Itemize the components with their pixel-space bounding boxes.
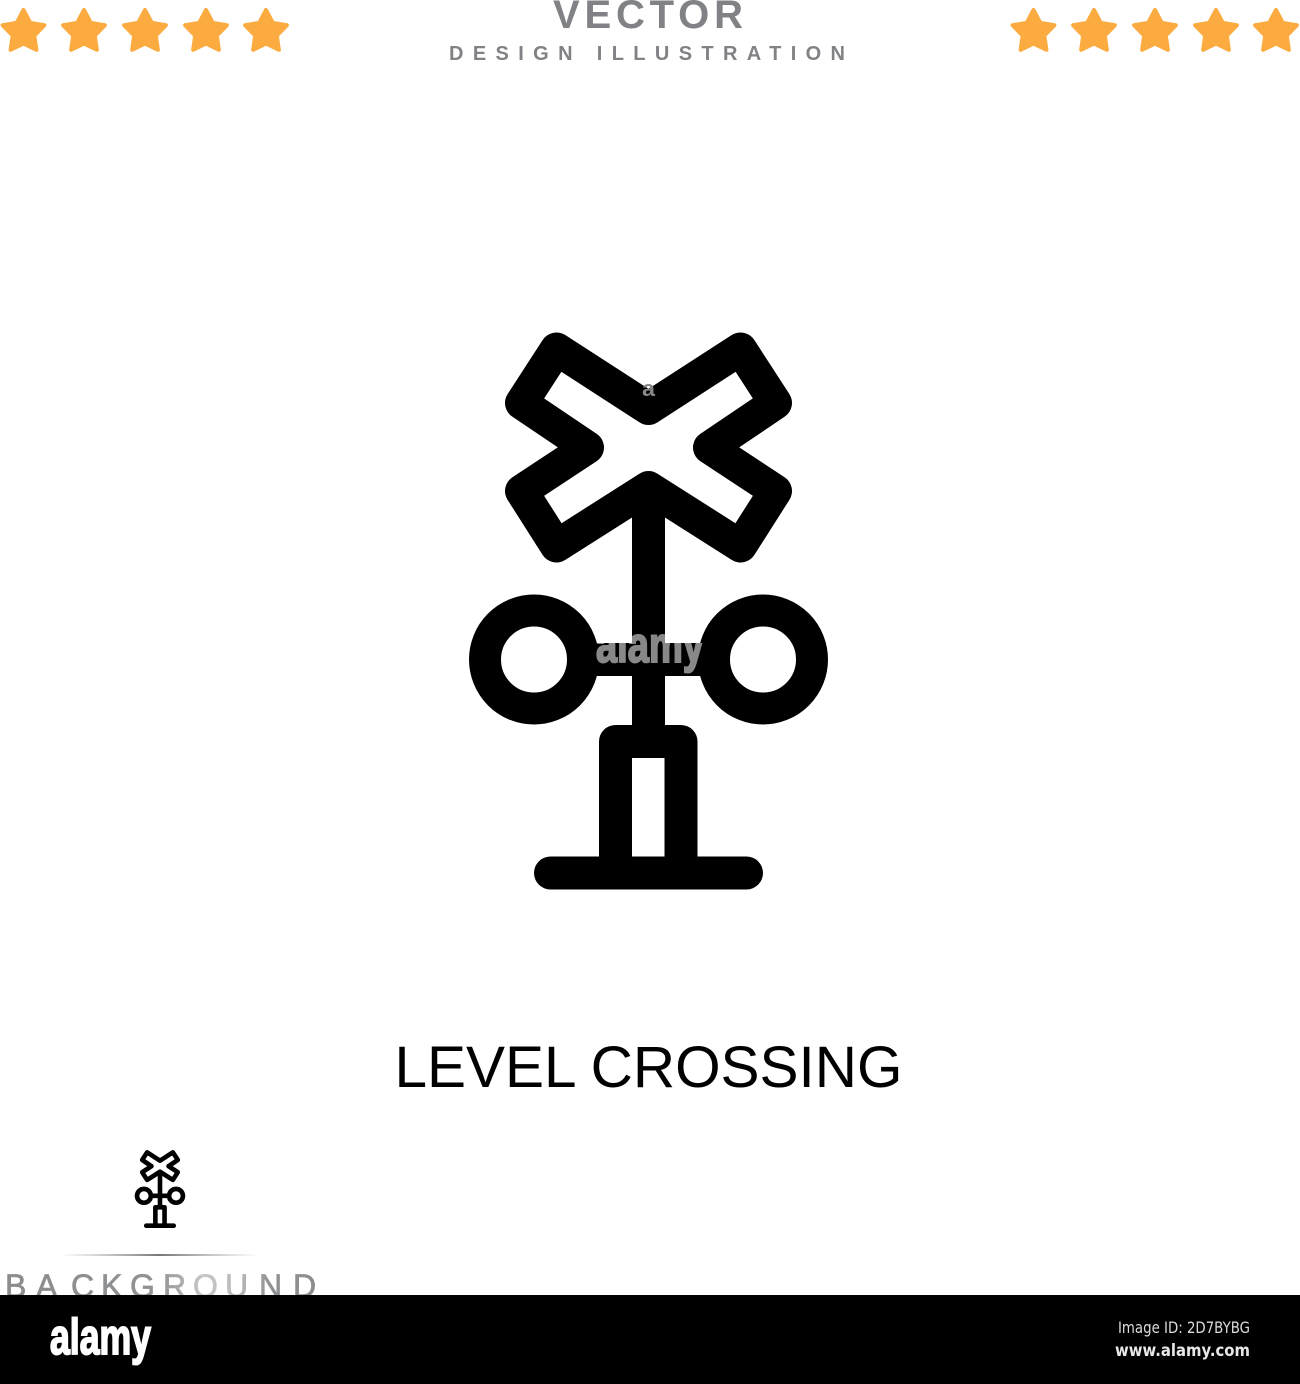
title: level crossing: LEVEL CROSSING <box>394 1035 902 1100</box>
left star rating <box>3 10 287 50</box>
icon: small level crossing sign <box>137 1152 183 1226</box>
icon: level crossing sign: a <box>642 376 656 401</box>
right star rating <box>1013 10 1297 50</box>
footer bar <box>0 1295 1300 1384</box>
logo: alamy: alamy <box>50 1309 151 1365</box>
image id: Image ID: 2D7BYBG <box>1118 1318 1250 1337</box>
subheading: design illustration: DESIGN ILLUSTRATION <box>449 43 845 65</box>
website url: www.alamy.com <box>1115 1341 1250 1361</box>
icon: level crossing sign <box>485 349 812 873</box>
caption: background: BACKGROUND <box>5 1268 316 1304</box>
icon: level crossing sign: alamy <box>596 617 704 673</box>
